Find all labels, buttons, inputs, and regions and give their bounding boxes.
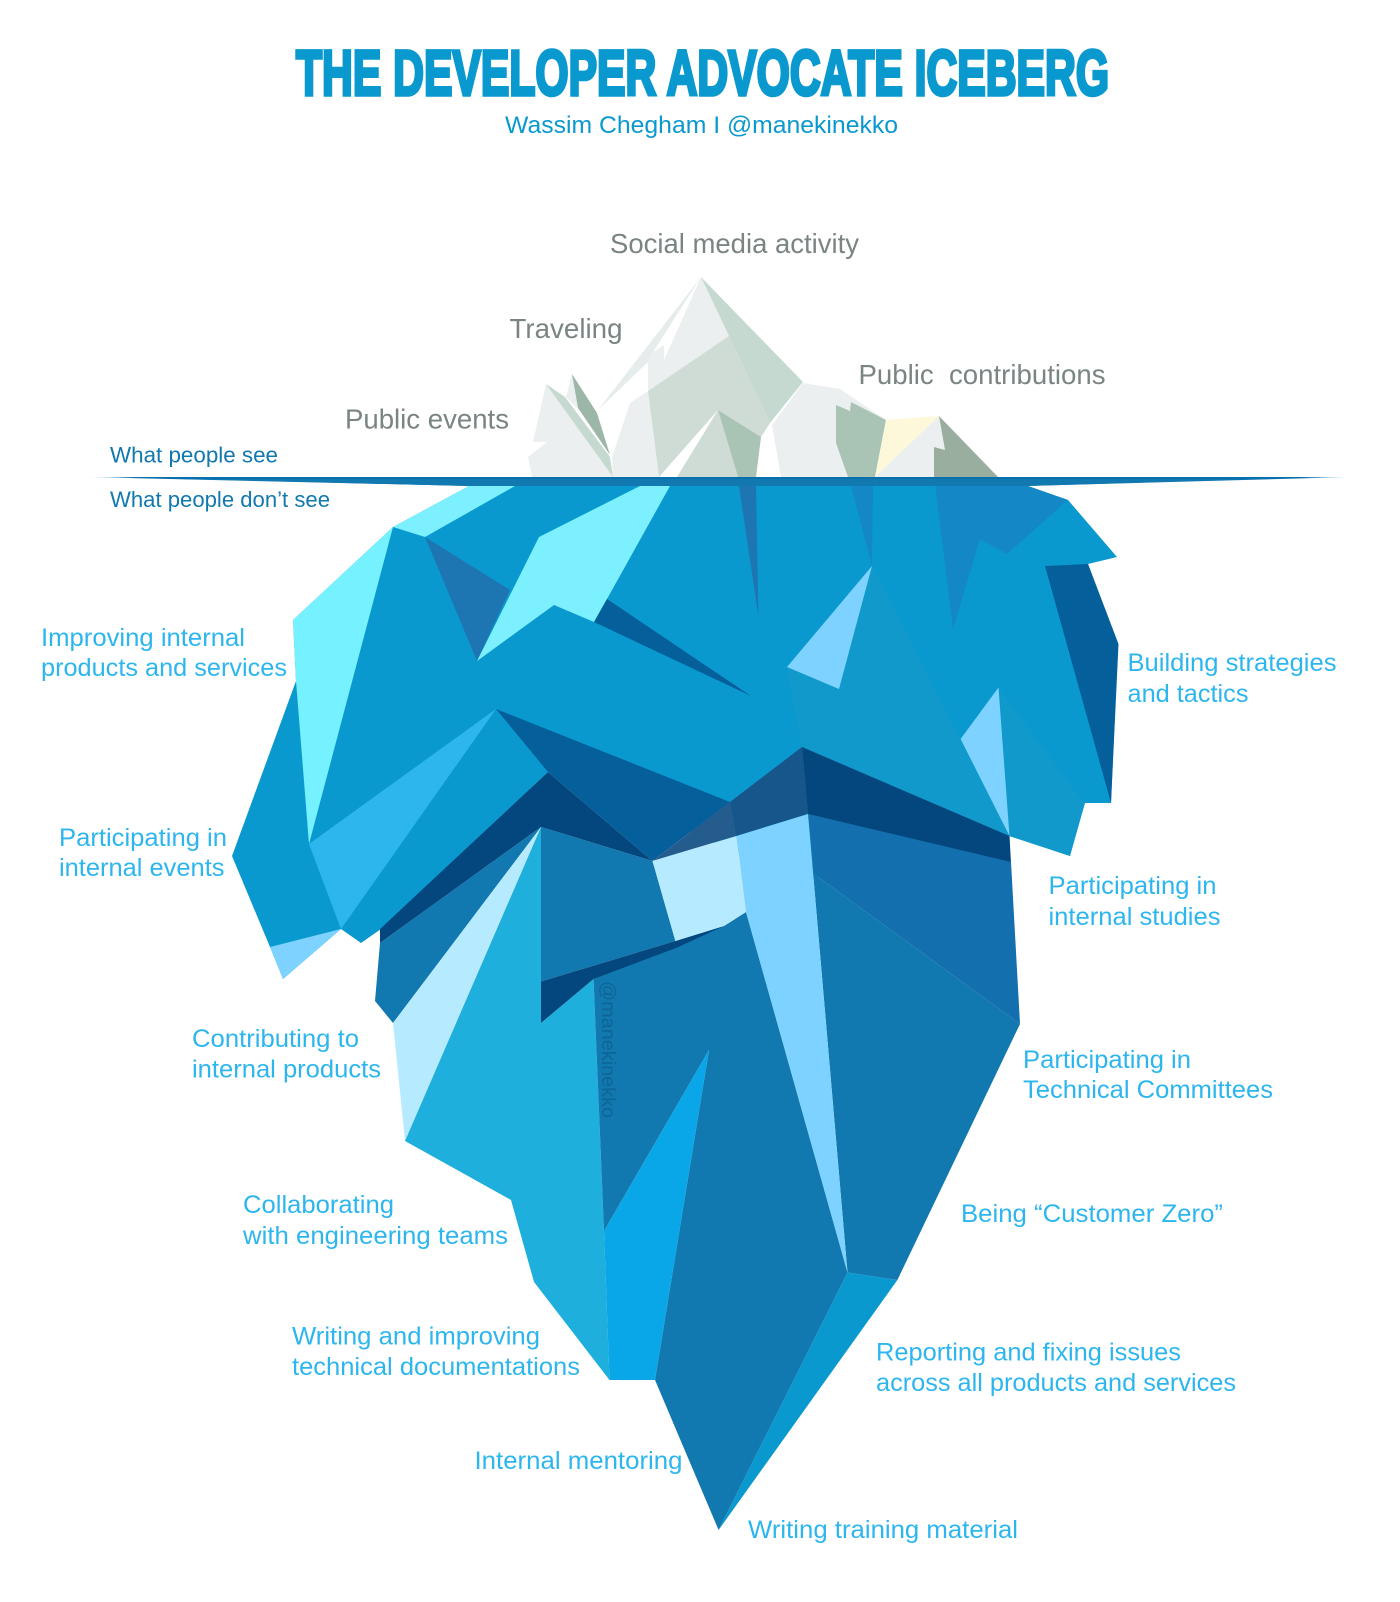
label: public contributions: Public contributions <box>858 359 1106 390</box>
facet: dark centre left <box>496 709 730 861</box>
label: social media activity: Social media activity <box>610 228 859 259</box>
label: public events: Public events <box>345 404 509 434</box>
label: reporting and fixing issues: across all products and services <box>876 1369 1236 1397</box>
label: participating in internal events <box>59 824 227 882</box>
label: internal mentoring: Internal mentoring <box>474 1447 682 1475</box>
facet: darker band right <box>802 747 1011 863</box>
label: contributing to internal products: internal products <box>192 1056 381 1084</box>
base shape <box>232 486 1118 979</box>
label: building strategies and tactics: and tactics <box>1128 680 1248 708</box>
facet: pale shard <box>393 827 541 1141</box>
facet: light triangle right <box>961 688 1010 836</box>
label: participating in internal studies: Participating in <box>1048 872 1216 900</box>
label: what people see: What people see <box>110 442 278 468</box>
label: contributing to internal products <box>192 1025 381 1084</box>
facet: deep centre <box>594 912 848 1530</box>
label: participating in internal events: internal events <box>59 854 224 882</box>
facet: bright triangle <box>604 1050 709 1380</box>
facet: right panel <box>808 814 1020 1024</box>
label: writing and improving technical documentations <box>292 1322 580 1381</box>
label: collaborating with engineering teams <box>242 1191 508 1250</box>
label: writing training material: Writing training material <box>748 1516 1018 1544</box>
label: reporting and fixing issues <box>876 1338 1236 1397</box>
facet: pale blue tip left <box>270 929 341 979</box>
facet: centre shadow <box>730 747 808 836</box>
label: improving internal products: Improving internal <box>41 624 245 652</box>
facet: central stripe <box>739 486 758 617</box>
label: participating in internal events: Participating in <box>59 824 227 852</box>
facet: pale square <box>652 836 746 941</box>
label: building strategies and tactics: Building strategies <box>1128 649 1336 677</box>
label: writing and improving technical documentations: Writing and improving <box>292 1322 540 1350</box>
facet: darker band left <box>380 772 652 943</box>
label: what people don't see: What people don’t see <box>110 487 330 512</box>
facet: deep right <box>808 814 1020 1280</box>
facet: right lower <box>1000 690 1084 856</box>
facet: cyan top left <box>393 486 515 537</box>
facet: cyan shard <box>477 486 670 661</box>
label: reporting and fixing issues: Reporting and fixing issues <box>876 1338 1181 1366</box>
label: collaborating with engineering teams: Collaborating <box>243 1191 394 1219</box>
label: contributing to internal products: Contributing to <box>192 1025 359 1053</box>
label: participating in technical committees <box>1023 1046 1273 1104</box>
label: participating in technical committees: Participating in <box>1023 1046 1191 1074</box>
label: participating in internal studies: internal studies <box>1048 903 1220 931</box>
facet: right stripe <box>851 486 873 566</box>
iceberg body below water <box>232 486 1118 1530</box>
label: participating in technical committees: Technical Committees <box>1023 1076 1273 1104</box>
facet: teal body <box>405 827 610 1380</box>
facet: mid blue <box>309 709 496 929</box>
facet: top right panel <box>935 486 1068 630</box>
label: improving internal products: products and services <box>41 654 287 682</box>
label: collaborating with engineering teams: with engineering teams <box>242 1222 508 1250</box>
label: writing and improving technical documentations: technical documentations <box>292 1353 580 1381</box>
facet: cyan left <box>293 527 393 844</box>
label: building strategies and tactics <box>1128 649 1336 708</box>
label: traveling: Traveling <box>510 313 622 344</box>
watermark: @manekinekko <box>597 981 619 1118</box>
label: participating in internal studies <box>1048 872 1220 931</box>
facet: centre shadow left <box>652 802 736 861</box>
iceberg tip above water <box>528 277 998 477</box>
facet: dark right side <box>1045 564 1118 803</box>
label: improving internal products <box>41 624 287 682</box>
subtitle: author: Wassim Chegham I @manekinekko <box>505 112 898 139</box>
facet: lighter right panel <box>787 566 1010 836</box>
facet: dark triangle <box>425 537 510 661</box>
main peak <box>598 277 803 477</box>
facet: dark sliver <box>594 599 751 696</box>
facet: dark strip <box>541 926 724 1023</box>
facet: light triangle centre <box>787 566 872 689</box>
label: being customer zero: Being “Customer Zero” <box>961 1200 1223 1228</box>
facet: deep left <box>375 827 541 1023</box>
left small peak <box>528 374 613 477</box>
facet: deep middle <box>541 827 675 982</box>
facet: bottom tip <box>719 1272 897 1530</box>
right ridge <box>772 383 998 477</box>
facet: pale blue strip <box>736 814 848 1272</box>
waterline <box>86 477 1352 486</box>
